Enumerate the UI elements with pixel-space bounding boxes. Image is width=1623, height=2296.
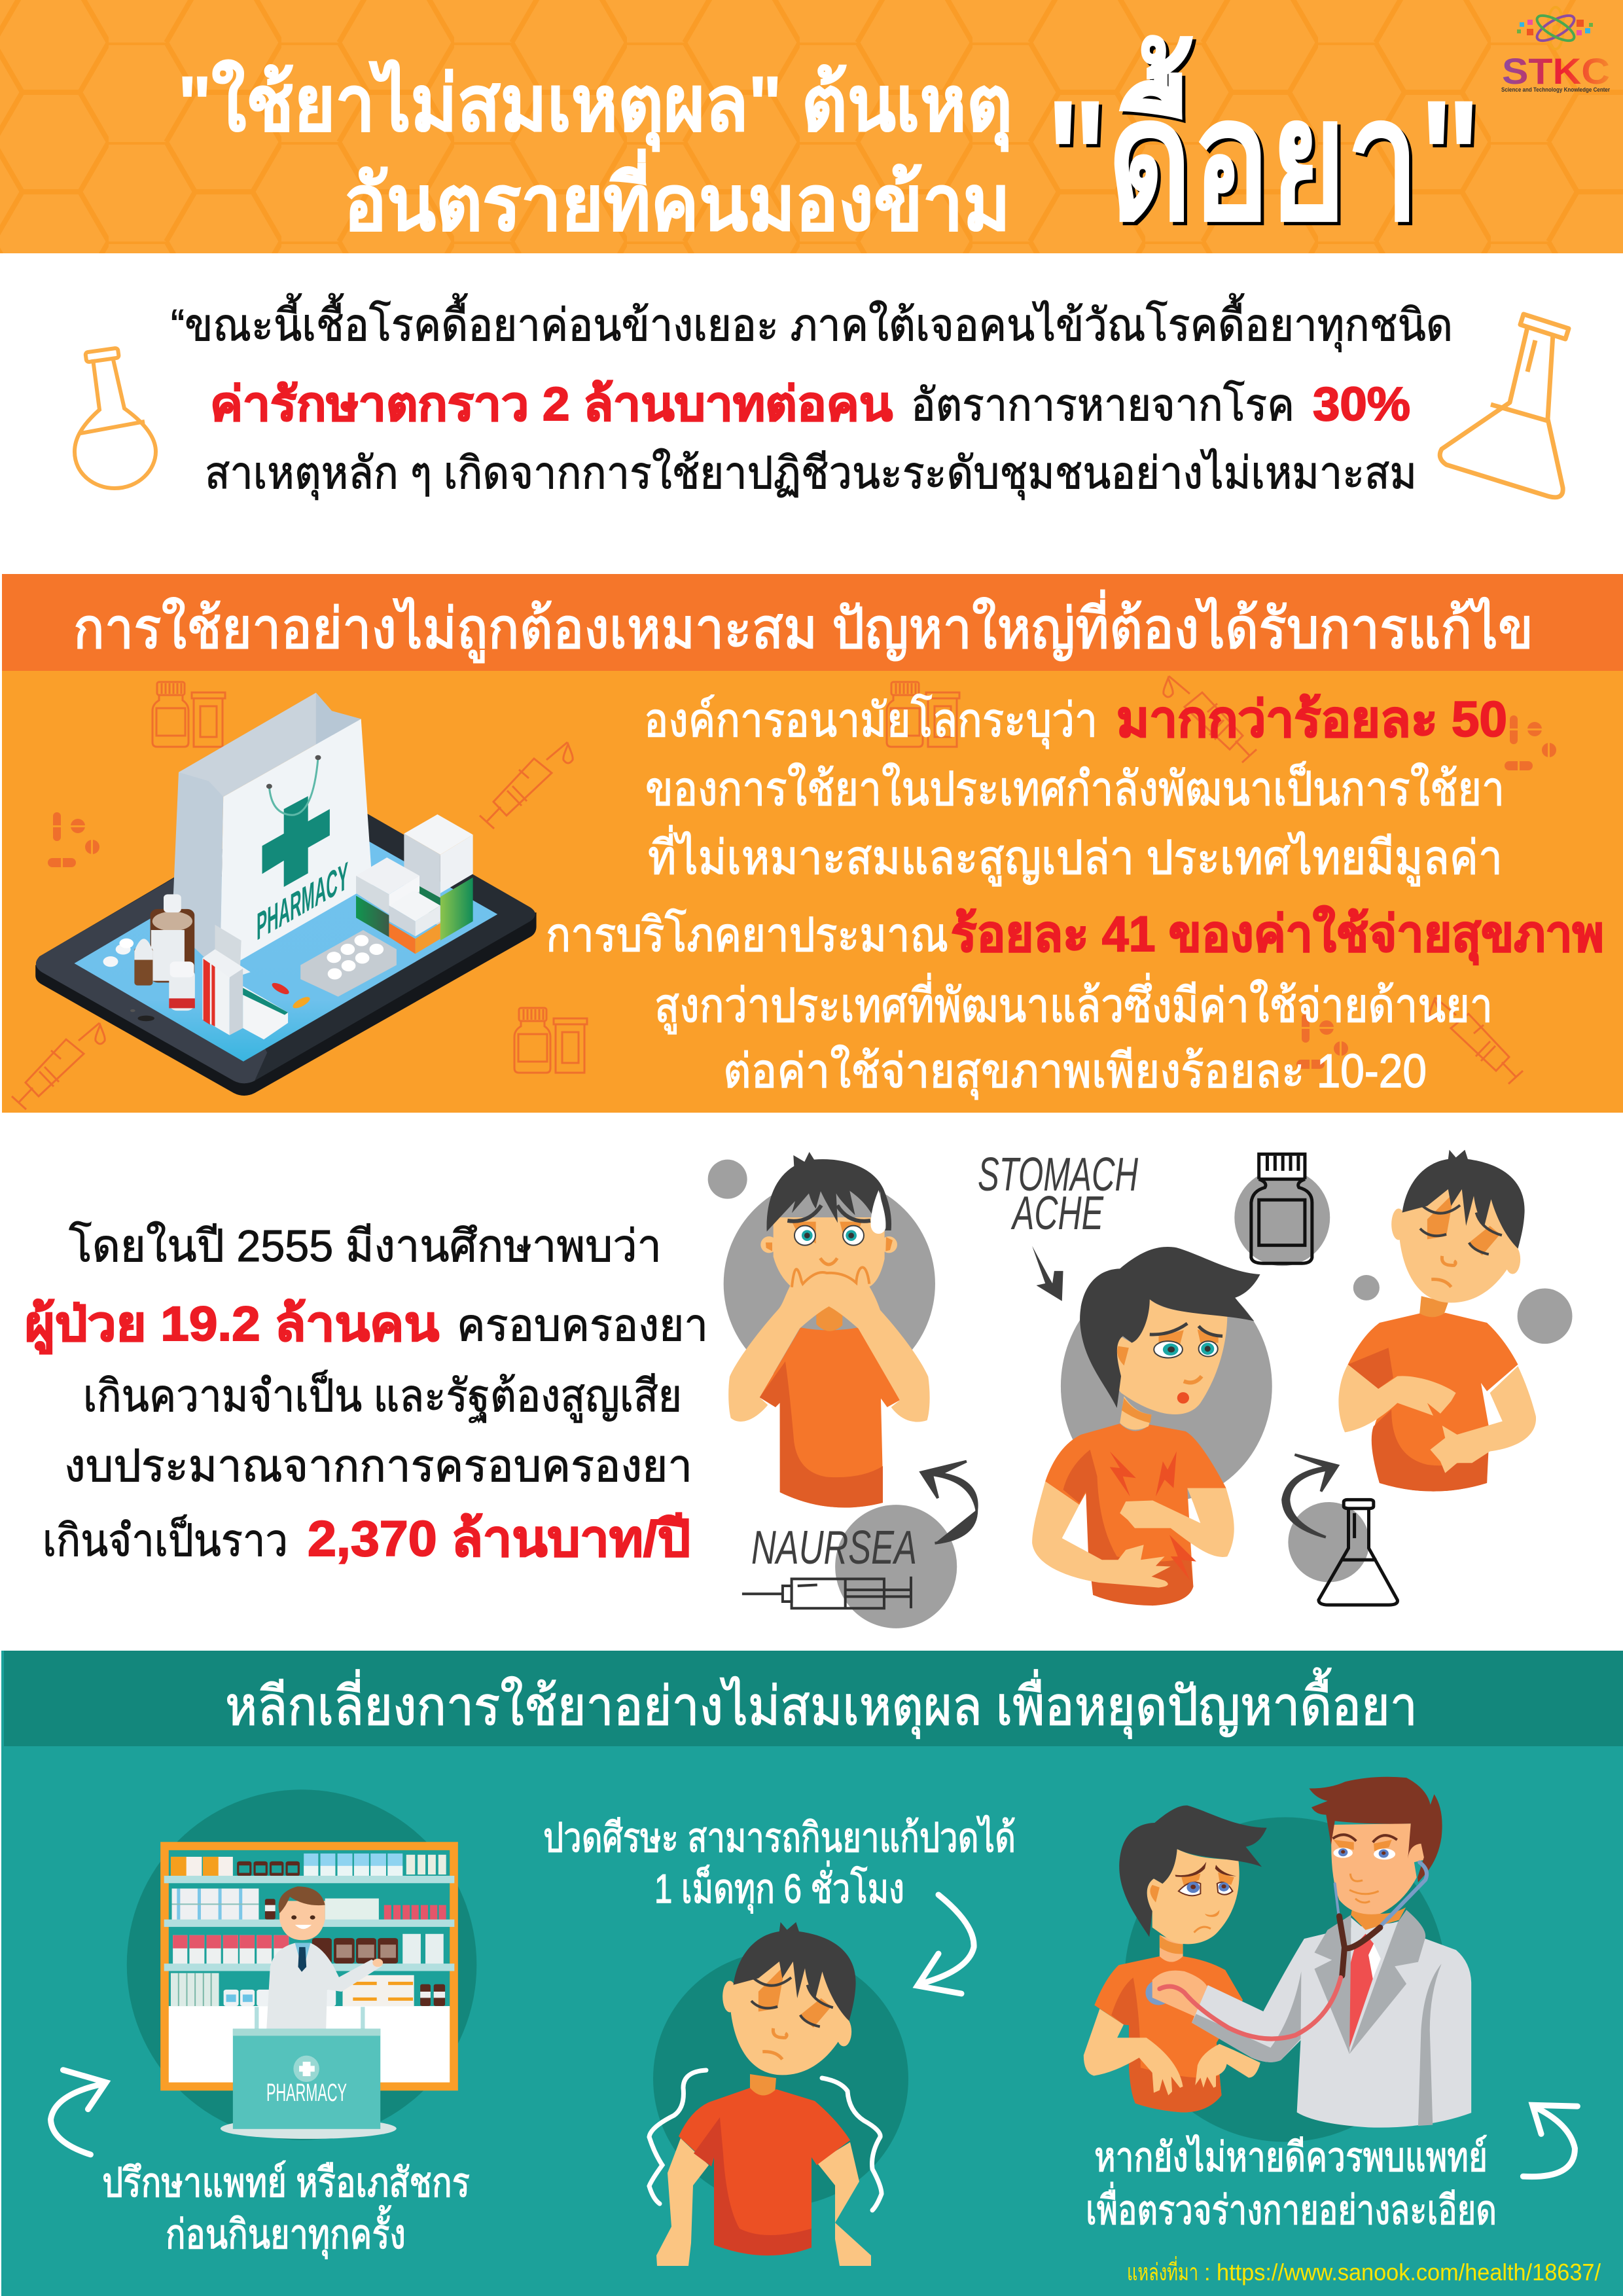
illustration: pharmacy shelf and pharmacist xyxy=(127,1789,476,2140)
icon: flask xyxy=(1319,1499,1397,1605)
illustration: stomach ache boy xyxy=(1032,1247,1272,1605)
text: PHARMACY xyxy=(257,853,348,949)
label: nausea: NAURSEA xyxy=(751,1522,917,1574)
patient head xyxy=(1119,1805,1267,1944)
text block: consult xyxy=(102,2161,470,2259)
doctor hand xyxy=(1152,1971,1207,2017)
intro line 2 black: อัตราการหายจากโรค xyxy=(911,380,1294,430)
stats line 5 red: 2,370 ล้านบาท/ปี xyxy=(308,1511,690,1567)
icon: atom logo xyxy=(1517,7,1593,49)
neck xyxy=(750,2074,776,2104)
line 6: ต่อค่าใช้จ่ายสุขภาพเพียงร้อยละ 10-20 xyxy=(723,1045,1427,1100)
patient arms xyxy=(1084,2009,1183,2095)
teal heading: หลีกเลี่ยงการใช้ยาอย่างไม่สมเหตุผล เพื่อหยุดปัญหาดื้อยา xyxy=(225,1668,1418,1739)
stethoscope xyxy=(1145,1862,1427,2005)
shirt xyxy=(760,1327,900,1507)
line 4 white: การบริโภคยาประมาณ xyxy=(546,908,948,961)
intro line 3: สาเหตุหลัก ๆ เกิดจากการใช้ยาปฏิชีวนะระดับชุมชนอย่างไม่เหมาะสม xyxy=(205,448,1417,500)
patient neck xyxy=(1160,1935,1183,1964)
source label: แหล่งที่มา xyxy=(1127,2256,1198,2286)
shopping bag xyxy=(179,692,361,797)
arms and hands xyxy=(728,1283,930,1422)
panel: teal section xyxy=(1,1651,1623,2296)
big title word: "ดื้อยา" xyxy=(1046,35,1481,256)
tablet xyxy=(35,912,537,1096)
illustration: doctor and patient xyxy=(1084,1777,1471,2142)
consult line 2: ก่อนกินยาทุกครั้ง xyxy=(166,2205,406,2259)
line 5: สูงกว่าประเทศที่พัฒนาแล้วซึ่งมีค่าใช้จ่ายด้านยา xyxy=(654,973,1493,1034)
shirt xyxy=(679,2088,850,2255)
panel: title banner xyxy=(0,0,1623,256)
illustration: pharmacy tablet xyxy=(35,692,537,1096)
shelf row 4 xyxy=(171,1973,445,2006)
panel: orange section xyxy=(2,574,1623,1113)
icons: watermark medicine icons xyxy=(12,676,1556,1109)
sweat xyxy=(871,1190,886,1234)
doctor hair xyxy=(1309,1777,1442,1882)
line 1 red: มากกว่าร้อยละ 50 xyxy=(1116,692,1507,747)
hair xyxy=(767,1152,891,1232)
cross xyxy=(262,796,330,887)
stats line 2 red: ผู้ป่วย 19.2 ล้านคน xyxy=(25,1297,439,1354)
text block: orange panel copy xyxy=(546,692,1604,1100)
counter legs xyxy=(255,2007,259,2032)
intro line 2 percent: 30% xyxy=(1313,378,1410,431)
text block: see doctor xyxy=(1086,2134,1497,2233)
line 3: ที่ไม่เหมาะสมและสูญเปล่า ประเทศไทยมีมูลค่า xyxy=(648,825,1503,886)
logo subtitle: Science and Technology Knowledge Center xyxy=(1501,86,1610,93)
illustration: dizzy boy holding stomach xyxy=(1338,1150,1572,1492)
decorative circles and icons around boys xyxy=(742,1154,1397,1628)
illustration: headache boy xyxy=(649,1922,908,2266)
title line 1: "ใช้ยาไม่สมเหตุผล" ต้นเหตุ xyxy=(178,60,1012,152)
patient shirt xyxy=(1094,1956,1243,2112)
arrow: to pharmacy xyxy=(50,2070,106,2155)
doctor face xyxy=(1331,1823,1417,1914)
tube xyxy=(1160,1977,1341,2039)
blister pack xyxy=(300,930,397,997)
arrow: from doctor xyxy=(1523,2105,1577,2177)
arms xyxy=(1032,1481,1171,1588)
head xyxy=(760,1236,777,1253)
intro line 1: “ขณะนี้เชื้อโรคดื้อยาค่อนข้างเยอะ ภาคใต้เจอคนไข้วัณโรคดื้อยาทุกชนิด xyxy=(171,293,1453,352)
neck xyxy=(816,1304,842,1331)
section heading bar xyxy=(2,574,1623,671)
text block: overtreatment stats xyxy=(25,1221,708,1567)
source credit xyxy=(1127,2256,1601,2286)
shelf row 3 xyxy=(173,1934,444,1964)
label: ache: ACHE xyxy=(1010,1187,1104,1240)
doctor neck xyxy=(1351,1907,1406,1930)
icon: conical flask xyxy=(1440,314,1569,497)
wavy lines xyxy=(649,2070,882,2210)
doctor shirt and tie xyxy=(1351,1918,1399,1979)
arms xyxy=(1338,1365,1456,1432)
pharmacist xyxy=(266,1886,383,2029)
line 4 red: ร้อยละ 41 ของค่าใช้จ่ายสุขภาพ xyxy=(951,905,1604,965)
shelf row 2 xyxy=(172,1888,446,1920)
text block: intro quote xyxy=(171,293,1453,500)
arrow: flask to right boy xyxy=(1283,1455,1338,1537)
line 2: ของการใช้ยาในประเทศกำลังพัฒนาเป็นการใช้ยา xyxy=(645,761,1505,816)
arrow: to stomach ache boy xyxy=(1032,1246,1063,1301)
gray blobs xyxy=(835,1505,957,1628)
title line 2: อันตรายที่คนมองข้าม xyxy=(344,149,1010,247)
boxes xyxy=(404,814,473,855)
shelf frame xyxy=(160,1842,458,2090)
icon: medicine bottle xyxy=(1251,1154,1312,1263)
source url: : https://www.sanook.com/health/18637/ xyxy=(1204,2259,1601,2286)
illustration: nausea boy xyxy=(708,1152,935,1507)
doctor coat xyxy=(1192,1922,1471,2128)
stats line 2 black: ครอบครองยา xyxy=(457,1300,708,1350)
logo wordmark: STKC xyxy=(1502,50,1610,92)
lapels xyxy=(1314,1915,1351,2054)
lightning marks xyxy=(1110,1451,1196,1580)
counter xyxy=(221,2118,397,2139)
head xyxy=(722,1922,856,2075)
doctor line 2: เพื่อตรวจร่างกายอย่างละเอียด xyxy=(1086,2182,1497,2233)
headache line 1: ปวดศีรษะ สามารถกินยาแก้ปวดได้ xyxy=(543,1815,1016,1861)
icon: round flask xyxy=(75,348,156,488)
stats line 3: เกินความจำเป็น และรัฐต้องสูญเสีย xyxy=(83,1370,682,1423)
teal heading bar xyxy=(4,1651,1623,1746)
capsules xyxy=(270,981,291,996)
shirt xyxy=(1045,1424,1226,1605)
stats line 1: โดยในปี 2555 มีงานศึกษาพบว่า xyxy=(69,1221,662,1271)
logo: STKC xyxy=(1501,7,1610,93)
stats line 5 black: เกินจำเป็นราว xyxy=(43,1515,288,1566)
arms xyxy=(656,2138,709,2266)
label: pharmacy counter: PHARMACY xyxy=(266,2079,347,2107)
doctor line 1: หากยังไม่หายดีควรพบแพทย์ xyxy=(1094,2134,1488,2180)
bottles xyxy=(151,909,194,982)
intro line 2 red: ค่ารักษาตกราว 2 ล้านบาทต่อคน xyxy=(210,378,893,431)
eyes xyxy=(794,1226,815,1246)
text block: headache advice xyxy=(543,1815,1016,1913)
headache line 2: 1 เม็ดทุก 6 ชั่วโมง xyxy=(654,1861,904,1913)
arrow: nausea to left boy xyxy=(921,1462,977,1543)
shelf row 1 xyxy=(171,1854,446,1876)
medicine boxes front xyxy=(215,925,241,972)
icon: syringe xyxy=(742,1577,911,1608)
label: stomach: STOMACH xyxy=(978,1149,1139,1201)
arrow: to headache boy xyxy=(918,1895,974,1994)
stats line 4: งบประมาณจากการครอบครองยา xyxy=(64,1441,692,1491)
section heading: การใช้ยาอย่างไม่ถูกต้องเหมาะสม ปัญหาใหญ่ที่ต้องได้รับการแก้ไข xyxy=(73,590,1533,663)
line 1 white: องค์การอนามัยโลกระบุว่า xyxy=(644,693,1097,749)
shirt xyxy=(1348,1313,1518,1492)
consult line 1: ปรึกษาแพทย์ หรือเภสัชกร xyxy=(102,2161,470,2206)
